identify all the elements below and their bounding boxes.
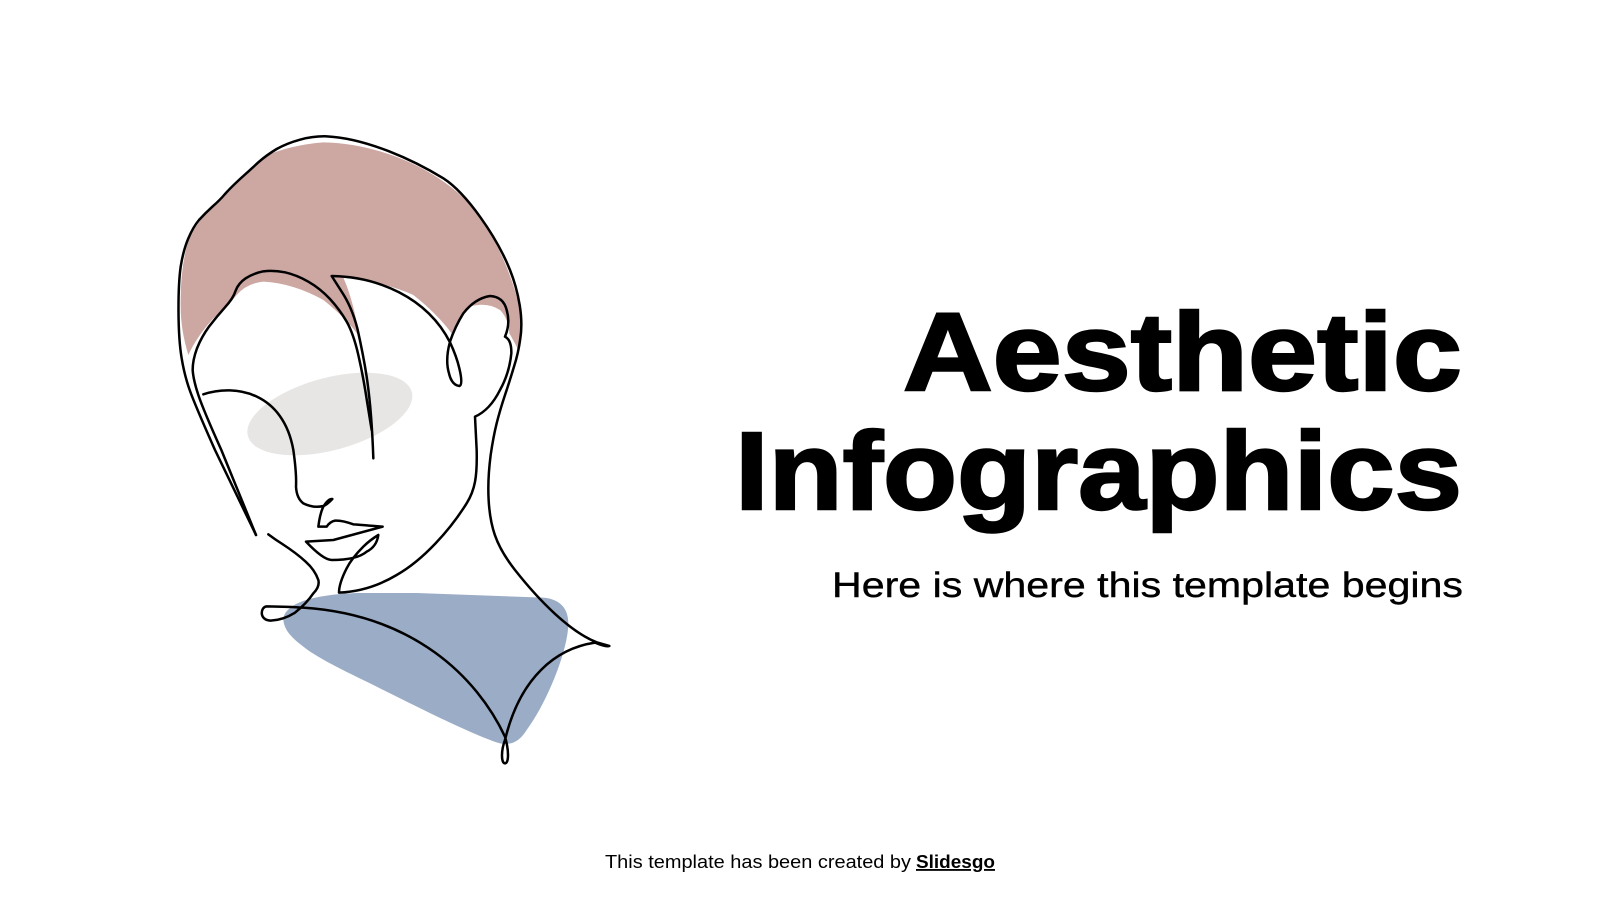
title (735, 291, 1462, 533)
illustration: one-line portrait (178, 136, 609, 763)
subtitle: Here is where this template begins (832, 566, 1463, 605)
title: Aesthetic (903, 291, 1462, 414)
footer credit: Slidesgo (916, 851, 995, 872)
title: Infographics (735, 410, 1462, 533)
line art: outer contour, neck and shoulders (178, 136, 609, 763)
footer credit: This template has been created by (605, 851, 912, 872)
line art: hairline, ear, jaw, lips and nose (203, 276, 511, 593)
eye grey blob (238, 357, 421, 471)
hair colour blob (181, 142, 522, 355)
shoulder blue blob (283, 593, 568, 744)
line art: inner hair strand (193, 271, 372, 535)
